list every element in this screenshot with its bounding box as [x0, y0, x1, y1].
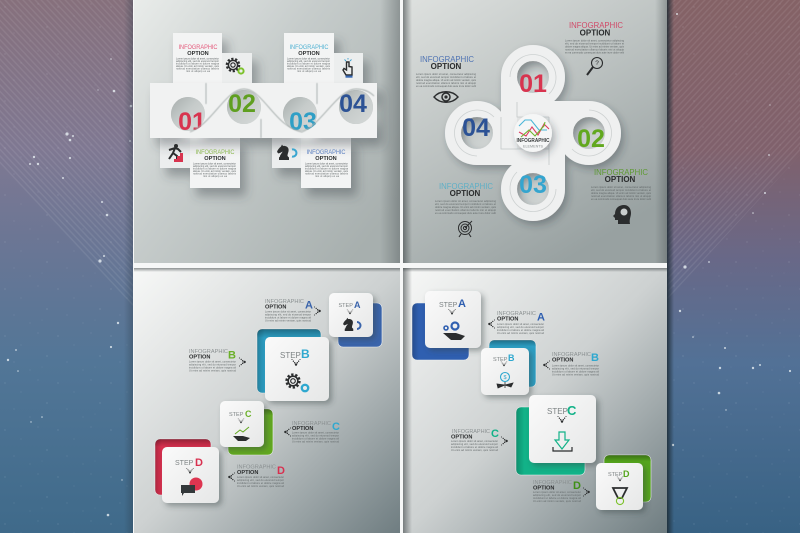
panel 4: steps descending: [403, 268, 667, 533]
card text: cyan: [287, 44, 331, 73]
back tile: blue: [338, 303, 382, 347]
background: left starfield: [0, 0, 134, 533]
card text: pink: nisi ut aliquip ex ea: [186, 70, 211, 73]
number circles: 01: [178, 108, 206, 136]
card text: cyan: INFOGRAPHIC: [290, 44, 329, 51]
step card B: [265, 337, 329, 401]
label B: OPTION: [552, 358, 573, 364]
label A: adipiscing elit, sed do eiusmod tempor: [265, 314, 311, 316]
card text: cyan: nisi ut aliquip ex ea: [297, 70, 322, 73]
label: option 01: ex ea commodo consequat duis aute irure dolor velit: [565, 52, 624, 54]
label C: [451, 428, 508, 452]
card text: pink: Lorem ipsum dolor sit amet, consectetur: [176, 58, 219, 60]
card text: blue: INFOGRAPHIC: [306, 149, 346, 156]
panel gutters: [133, 0, 667, 533]
label: option 02: OPTION: [605, 175, 636, 184]
centre badge: INFOGRAPHIC: [516, 138, 550, 144]
step card D: [596, 463, 643, 510]
label: option 04: ex ea commodo consequat duis aute irure dolor velit: [416, 85, 476, 88]
card text: green: incididunt ut labore et dolore magna: [193, 168, 237, 170]
label A: Ut enim ad minim veniam, quis nostrud: [497, 332, 545, 335]
step card C: C: [567, 403, 577, 418]
label: option 01: Lorem ipsum dolor sit amet, consectetur adipiscing: [565, 40, 625, 42]
label D: Lorem ipsum dolor sit amet, consectetur: [533, 491, 581, 494]
label: option 02: INFOGRAPHIC: [594, 168, 648, 177]
label C: Lorem ipsum dolor sit amet, consectetur: [451, 440, 498, 443]
step card D: STEP: [175, 460, 194, 467]
label D: Lorem ipsum dolor sit amet, consectetur: [237, 476, 284, 479]
ribbon seams: [501, 102, 549, 165]
step card B: B: [301, 347, 310, 361]
label D: INFOGRAPHIC: [533, 480, 572, 486]
label B: incididunt ut labore et dolore magna ali: [189, 366, 236, 370]
label B: incididunt ut labore et dolore magna ali: [552, 370, 599, 374]
step card D: STEP: [608, 472, 623, 478]
label: option 04: dolore magna aliqua. Ut enim ad minim veniam, quis: [416, 79, 477, 82]
label: option 04: INFOGRAPHIC: [420, 55, 474, 64]
card text: green: OPTION: [204, 156, 226, 162]
back tile: green: [604, 455, 651, 502]
label B: B: [228, 350, 236, 362]
card text: pink: incididunt ut labore et dolore magna: [176, 62, 220, 66]
label: option 03: elit, sed do eiusmod tempor incididunt ut labore et: [435, 203, 496, 206]
number circles: 04: [339, 90, 367, 118]
card text: blue: Lorem ipsum dolor sit amet, consectetur: [305, 162, 348, 166]
label: option 01: OPTION: [580, 28, 611, 38]
label C: incididunt ut labore et dolore magna ali: [292, 438, 339, 440]
label: option 03: dolore magna aliqua. Ut enim ad minim veniam, quis: [435, 206, 497, 209]
number circles: [171, 90, 373, 136]
label B: INFOGRAPHIC: [552, 352, 591, 358]
label: option 03: INFOGRAPHIC: [439, 182, 493, 191]
label B: Lorem ipsum dolor sit amet, consectetur: [189, 360, 236, 364]
card text: cyan: Lorem ipsum dolor sit amet, consectetur: [287, 58, 330, 60]
icon: head with gear: [613, 205, 631, 224]
step card A: A: [458, 298, 466, 310]
card text: pink: INFOGRAPHIC: [178, 44, 218, 51]
label C: adipiscing elit, sed do eiusmod tempor: [451, 443, 498, 446]
label A: [265, 299, 321, 322]
label: option 03: OPTION: [450, 189, 481, 198]
step card C: C: [245, 409, 252, 419]
label D: D: [277, 465, 285, 477]
card text: pink: nostrud exercitation ullamco laboris: [176, 68, 220, 70]
label A: A: [537, 312, 545, 324]
panel 1: wave numbered options: [134, 0, 400, 263]
page edge shadow on the right: [667, 0, 674, 533]
card text: cyan: nostrud exercitation ullamco laboris: [287, 68, 331, 70]
label: option 01: [565, 21, 625, 54]
clover ribbons: [453, 53, 613, 213]
icon: eye: [434, 92, 458, 102]
card text: pink: aliqua. Ut enim ad minim veniam, quis: [176, 65, 220, 68]
card text: pink: [176, 44, 220, 73]
label C: OPTION: [451, 434, 472, 440]
card text: green: INFOGRAPHIC: [196, 149, 235, 156]
label B: [189, 349, 246, 372]
label C: C: [332, 421, 340, 433]
ring holes: [460, 60, 606, 206]
top card 1: [173, 33, 252, 83]
label A: incididunt ut labore et dolore magna ali: [265, 316, 311, 320]
label: option 04: Lorem ipsum dolor sit amet, consectetur adipiscing: [416, 73, 477, 76]
background: right starfield: [666, 0, 800, 533]
card text: blue: adipiscing elit, sed do eiusmod tempor: [305, 165, 348, 168]
label C: C: [491, 428, 499, 440]
label C: [284, 421, 340, 444]
label: option 03: [435, 182, 497, 215]
number circles: 03: [289, 108, 317, 136]
card text: blue: nisi ut aliquip ex ea: [315, 175, 340, 178]
label: option 03: ex ea commodo consequat duis aute irure dolor velit: [435, 212, 496, 215]
step card C: STEP: [229, 412, 244, 418]
label C: Ut enim ad minim veniam, quis nostrud: [292, 440, 340, 444]
wave seams: [190, 83, 374, 138]
label C: Ut enim ad minim veniam, quis nostrud: [451, 449, 499, 452]
label B: B: [591, 352, 599, 364]
step card C: [529, 395, 596, 463]
label A: [488, 311, 545, 335]
step card D: D: [623, 469, 630, 479]
label B: OPTION: [189, 354, 210, 360]
label: option 02: Lorem ipsum dolor sit amet, consectetur adipiscing: [591, 186, 652, 189]
step card B: STEP: [280, 351, 301, 360]
label D: Ut enim ad minim veniam, quis nostrud: [237, 485, 285, 488]
label C: adipiscing elit, sed do eiusmod tempor: [292, 434, 339, 438]
card text: green: nostrud exercitation ullamco laboris: [193, 172, 237, 176]
panel 3: steps ascending: [134, 268, 400, 533]
ring numbers: 04: [462, 114, 490, 142]
ring numbers: 01: [519, 70, 547, 98]
bottom card 1: [160, 138, 240, 188]
label A: INFOGRAPHIC: [497, 311, 536, 317]
label: option 04: OPTION: [431, 62, 462, 71]
label C: Lorem ipsum dolor sit amet, consectetur: [292, 432, 339, 434]
back tile: teal: [516, 407, 585, 475]
step card A: STEP: [338, 303, 353, 309]
card text: cyan: OPTION: [298, 51, 320, 57]
ring detail lines: [454, 54, 612, 212]
step card A: STEP: [439, 302, 458, 309]
card text: pink: OPTION: [187, 51, 209, 57]
label: option 01: dolore magna aliqua. Ut enim ad minim veniam, quis: [565, 46, 625, 48]
back tile: cyan: [489, 340, 536, 387]
label A: incididunt ut labore et dolore magna ali: [497, 329, 544, 332]
card text: green: nisi ut aliquip ex ea: [203, 175, 228, 178]
label B: Ut enim ad minim veniam, quis nostrud: [189, 370, 237, 372]
label: option 02: ex ea commodo consequat duis aute irure dolor velit: [591, 198, 651, 201]
label: option 04: nostrud exercitation ullamco laboris nisi ut aliquip: [416, 82, 477, 85]
label D: [533, 480, 590, 503]
label D: adipiscing elit, sed do eiusmod tempor: [237, 479, 284, 482]
card text: blue: aliqua. Ut enim ad minim veniam, quis: [305, 170, 349, 173]
wave band: [150, 83, 377, 138]
label C: incididunt ut labore et dolore magna ali: [451, 446, 498, 449]
label D: incididunt ut labore et dolore magna ali: [533, 497, 581, 500]
bottom card 2: [272, 138, 351, 188]
label D: incididunt ut labore et dolore magna ali: [237, 482, 284, 485]
label A: Ut enim ad minim veniam, quis nostrud: [265, 320, 312, 322]
back tile: blue: [412, 303, 469, 360]
back tile: red: [155, 439, 211, 495]
label A: A: [305, 300, 313, 312]
card text: cyan: adipiscing elit, sed do eiusmod tempor: [287, 60, 330, 63]
step card B: STEP: [493, 357, 508, 363]
card text: green: Lorem ipsum dolor sit amet, consectetur: [193, 162, 236, 166]
label: option 03: nostrud exercitation ullamco laboris nisi ut aliquip: [435, 209, 497, 212]
label: option 04: [416, 55, 477, 88]
label: option 01: elit, sed do eiusmod tempor incididunt ut labore et: [565, 42, 624, 46]
label D: OPTION: [533, 486, 554, 492]
label: option 01: INFOGRAPHIC: [569, 21, 623, 30]
label: option 02: elit, sed do eiusmod tempor incididunt ut labore et: [591, 189, 651, 192]
label D: Ut enim ad minim veniam, quis nostrud: [533, 500, 582, 503]
card text: blue: OPTION: [315, 156, 337, 162]
label A: INFOGRAPHIC: [265, 299, 304, 305]
label C: OPTION: [292, 426, 313, 432]
icon: magnifier: [587, 58, 602, 75]
label A: OPTION: [497, 316, 518, 322]
label B: Lorem ipsum dolor sit amet, consectetur: [552, 364, 599, 368]
card text: blue: incididunt ut labore et dolore magna: [305, 168, 349, 170]
icon: hand pointer: [343, 58, 352, 78]
step card A: A: [354, 300, 361, 310]
label D: [228, 464, 285, 488]
number circles: 02: [228, 90, 256, 118]
step card D: [162, 447, 219, 503]
card text: blue: nostrud exercitation ullamco laboris: [305, 172, 349, 176]
card text: blue: [305, 149, 349, 178]
icon: chess knight: [277, 144, 296, 160]
panel 2: clover ring options: [403, 0, 667, 263]
label B: Ut enim ad minim veniam, quis nostrud: [552, 374, 600, 376]
label B: adipiscing elit, sed do eiusmod tempor: [189, 364, 236, 366]
card text: pink: adipiscing elit, sed do eiusmod tempor: [176, 60, 219, 63]
label B: [543, 352, 600, 376]
centre badge: ELEMENTS: [523, 144, 544, 148]
label: option 01: nostrud exercitation ullamco laboris nisi ut aliquip: [565, 48, 625, 52]
step card C: STEP: [547, 407, 568, 416]
label C: INFOGRAPHIC: [292, 421, 331, 427]
centre badge: [514, 114, 552, 152]
label D: D: [573, 480, 581, 492]
label D: adipiscing elit, sed do eiusmod tempor: [533, 494, 581, 497]
icon: target: [458, 221, 472, 237]
label: option 03: Lorem ipsum dolor sit amet, consectetur adipiscing: [435, 200, 497, 203]
label: option 02: [591, 168, 652, 201]
step card A: [329, 293, 373, 337]
top card 2: [284, 33, 363, 83]
label D: INFOGRAPHIC: [237, 464, 276, 470]
label C: INFOGRAPHIC: [452, 429, 490, 435]
label A: Lorem ipsum dolor sit amet, consectetur: [497, 323, 544, 326]
step card B: [481, 348, 529, 395]
icon: magnifier: ?: [595, 60, 599, 67]
label A: adipiscing elit, sed do eiusmod tempor: [497, 326, 544, 329]
card text: green: aliqua. Ut enim ad minim veniam, quis: [193, 170, 237, 173]
card text: cyan: aliqua. Ut enim ad minim veniam, quis: [287, 65, 331, 68]
step card A: [425, 291, 481, 348]
back tile: cyan: [257, 329, 321, 393]
label D: OPTION: [237, 470, 258, 476]
icon: gears: [227, 59, 244, 74]
ring numbers: [462, 70, 605, 199]
label: option 02: dolore magna aliqua. Ut enim ad minim veniam, quis: [591, 192, 652, 195]
step card B: $: [503, 375, 507, 381]
back tile: green: [228, 409, 273, 455]
icon: runner on stairs: [169, 144, 183, 162]
label A: Lorem ipsum dolor sit amet, consectetur: [265, 310, 311, 314]
step card C: [220, 401, 264, 447]
step card B: B: [508, 353, 515, 363]
label B: INFOGRAPHIC: [189, 349, 228, 355]
label B: adipiscing elit, sed do eiusmod tempor: [552, 368, 599, 370]
label A: OPTION: [265, 304, 286, 310]
card text: green: adipiscing elit, sed do eiusmod tempor: [193, 165, 236, 168]
ring numbers: 03: [519, 171, 547, 199]
step card D: D: [195, 457, 203, 469]
label: option 04: elit, sed do eiusmod tempor incididunt ut labore et: [416, 76, 476, 79]
label: option 02: nostrud exercitation ullamco laboris nisi ut aliquip: [591, 195, 652, 198]
card text: green: [193, 149, 237, 178]
card text: cyan: incididunt ut labore et dolore magna: [287, 62, 331, 66]
ring numbers: 02: [577, 125, 605, 153]
